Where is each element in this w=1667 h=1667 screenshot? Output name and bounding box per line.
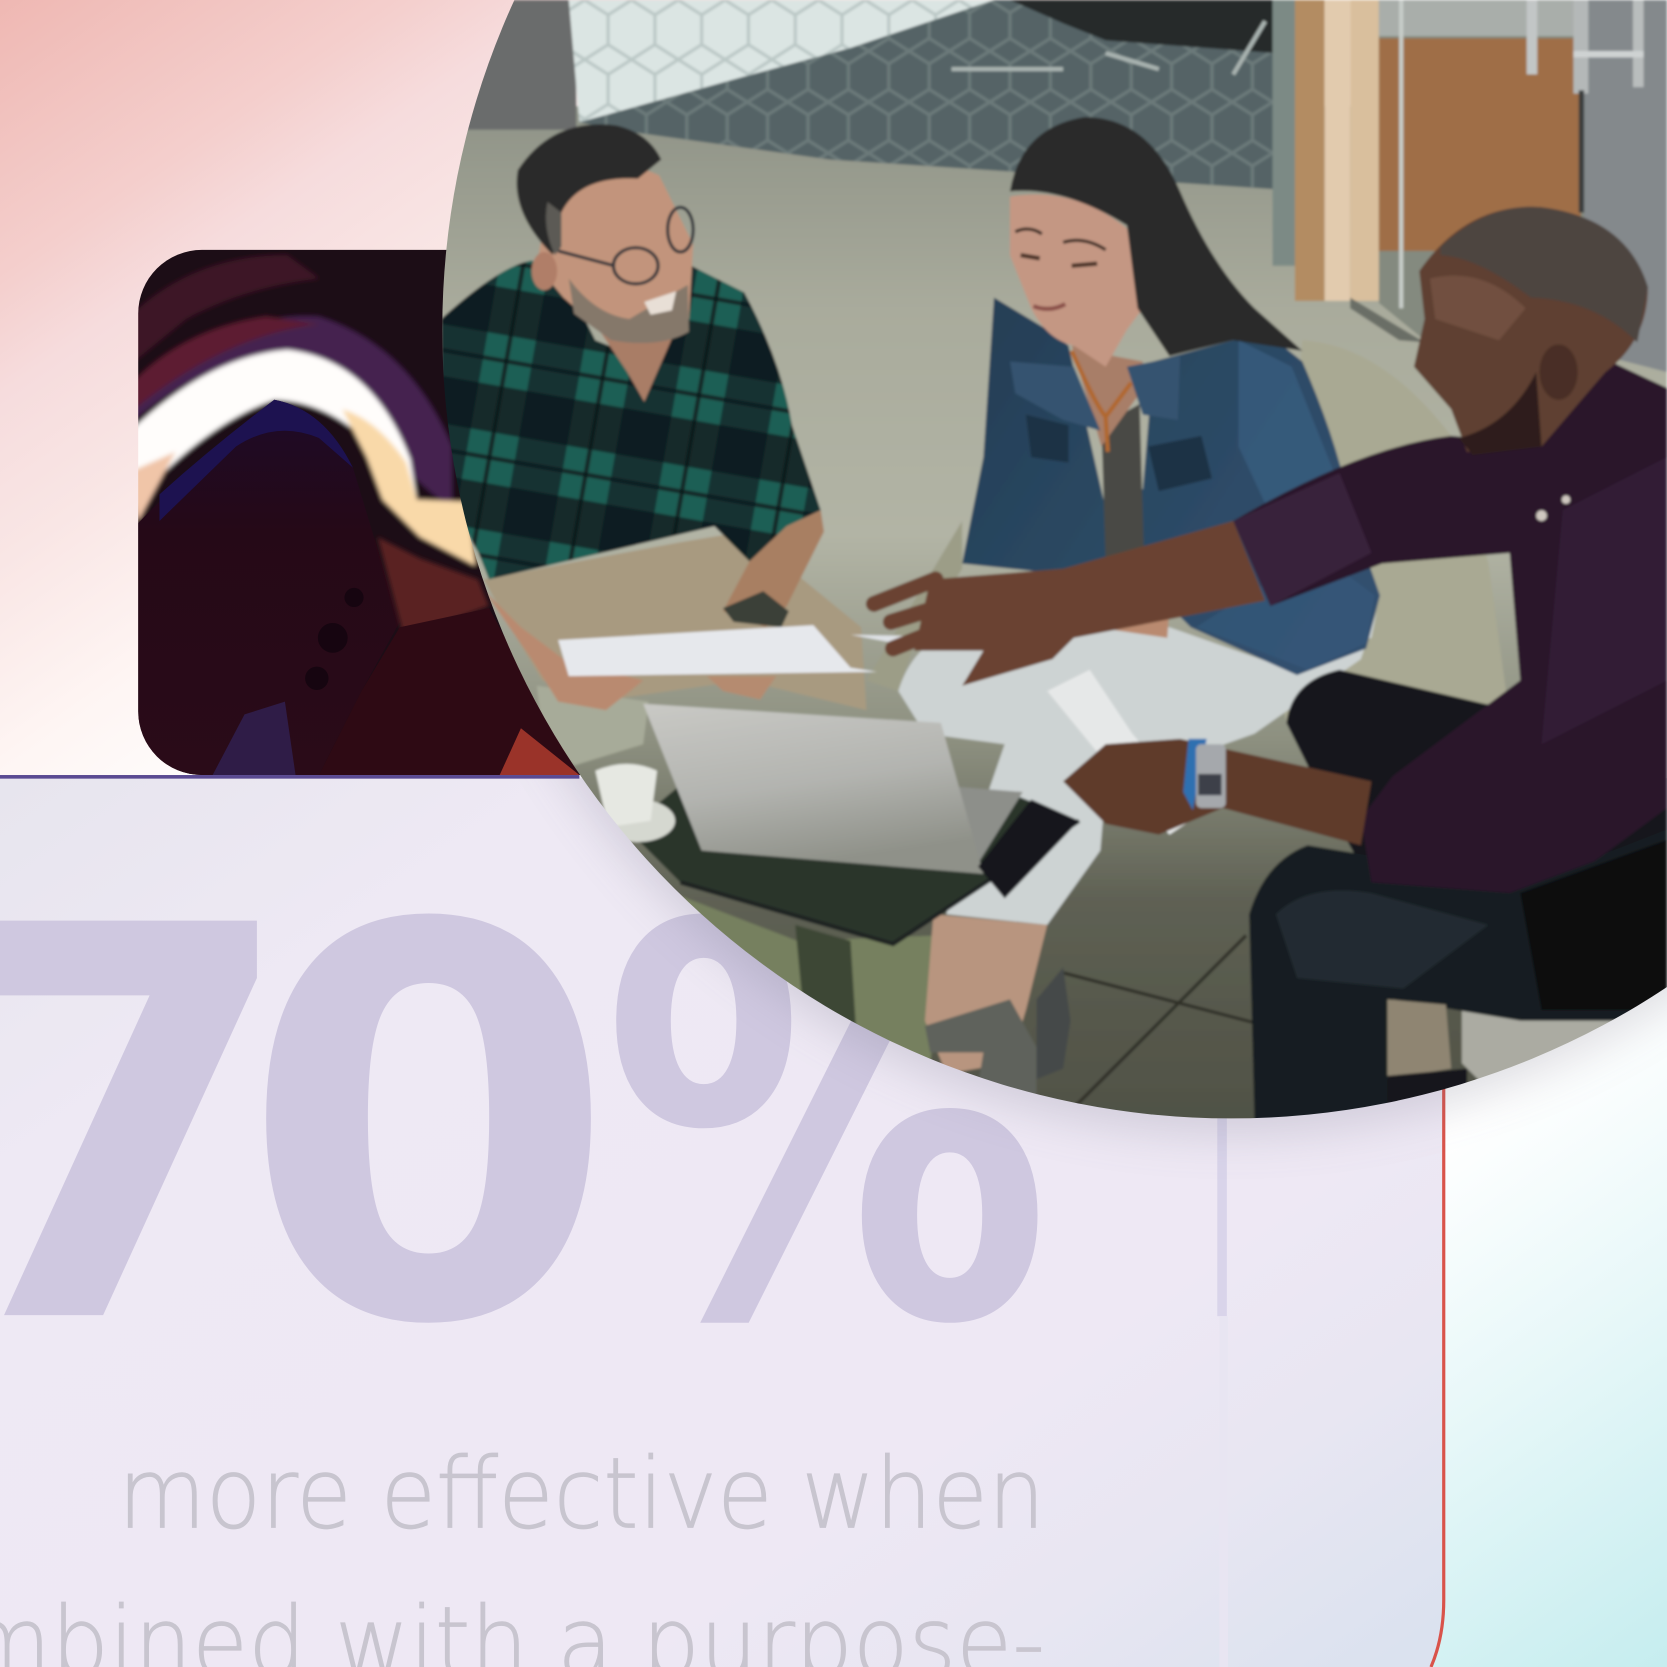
- paper held by man left: [558, 625, 877, 676]
- man left: chest: [595, 319, 680, 402]
- woman: denim jacket: [962, 298, 1380, 675]
- panel: lavender content card: [0, 776, 1444, 1667]
- faint vertical divider: [1217, 1106, 1228, 1667]
- background: glass walls: [425, 0, 1296, 266]
- glass table: [627, 776, 1079, 1026]
- woman: hair and face: [1010, 117, 1302, 367]
- man left: plaid shirt: [441, 260, 821, 579]
- man left: forearms and watch: [484, 510, 824, 710]
- small paper: [851, 635, 1005, 651]
- big statistic: 70%: %: [602, 813, 1052, 1444]
- man left: head: [517, 124, 693, 343]
- floor under table: [682, 896, 932, 1059]
- man right: pointing arm and hand: [874, 521, 1265, 686]
- big statistic: 70%: 0: [240, 813, 617, 1443]
- laptop and tablet: [643, 704, 1079, 898]
- floor tile seams: [1063, 936, 1255, 1118]
- purple top rule of panel: [0, 775, 579, 779]
- woman: hand: [1074, 606, 1169, 638]
- man right: receipt paper: [1047, 670, 1201, 835]
- man left: trousers: [484, 532, 866, 710]
- shadow beneath photo circle: [554, 778, 1667, 1148]
- right glass door and wood block: [1350, 0, 1667, 372]
- statement text: [0, 1438, 1045, 1667]
- man right: shirt: [1233, 361, 1667, 893]
- man right: head: [1414, 207, 1648, 455]
- red edge line of panel: [1431, 1084, 1444, 1667]
- armchairs: [537, 340, 1627, 1090]
- statement text: more effective when: [118, 1438, 1045, 1552]
- wood pillar: [1295, 0, 1380, 301]
- man right: trousers: [1249, 670, 1667, 1122]
- photo: three colleagues meeting around a laptop: [425, 0, 1667, 1127]
- photo: canyon rock in rounded frame: [138, 250, 580, 775]
- floor: [425, 106, 1667, 1127]
- man right: lower arm, hand and watch: [1063, 739, 1371, 845]
- big statistic: 70%: [0, 813, 1052, 1444]
- woman: trousers and ankles: [898, 611, 1377, 1095]
- coffee cup and saucer: [595, 764, 675, 842]
